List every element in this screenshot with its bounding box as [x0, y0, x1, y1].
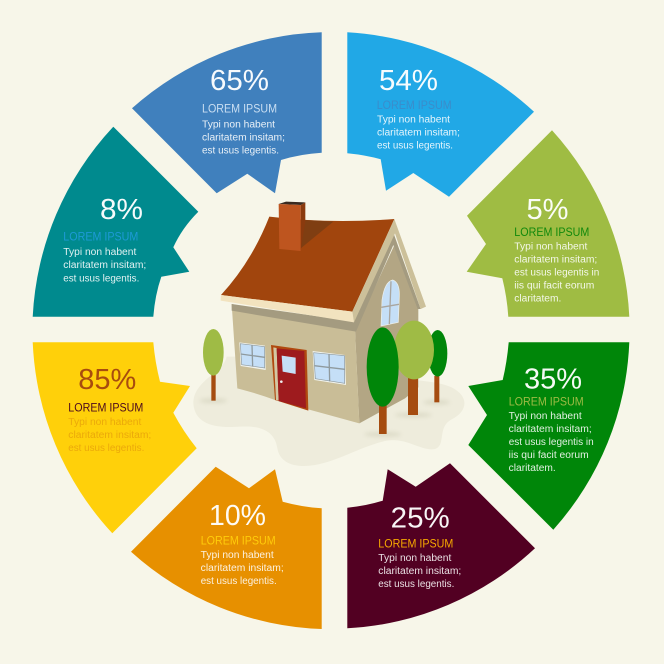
heading: LOREM IPSUM: [378, 539, 453, 551]
percentage: 25%: [391, 503, 450, 535]
tree: small left: [199, 329, 227, 403]
heading: LOREM IPSUM: [68, 403, 143, 415]
body text: [68, 417, 151, 454]
body text: Typi non habent: [378, 553, 452, 564]
side wall: [355, 246, 418, 423]
body text: [63, 247, 146, 284]
chimney shadow on roof: [301, 220, 333, 248]
percentage: 35%: [524, 363, 582, 395]
body text: claritatem insitam;: [377, 128, 460, 138]
panel: 10% orange: [131, 467, 322, 629]
body text: est usus legentis.: [202, 146, 279, 156]
heading: LOREM IPSUM: [201, 535, 276, 547]
body text: claritatem insitam;: [63, 260, 146, 271]
tree: back right: [423, 330, 450, 405]
body text: claritatem insitam;: [201, 563, 284, 574]
body text: Typi non habent: [509, 411, 582, 422]
gable trim: [352, 219, 426, 322]
body text: est usus legentis.: [378, 579, 454, 590]
body text: [514, 242, 599, 304]
percentage: 8%: [100, 194, 143, 226]
roof: [221, 217, 394, 312]
body text: claritatem insitam;: [202, 132, 285, 144]
body text: Typi non habent: [201, 550, 274, 561]
body text: claritatem.: [514, 294, 561, 304]
ground patch: [193, 357, 464, 466]
chimney: [279, 202, 305, 251]
body text: est usus legentis in: [509, 437, 594, 448]
body text: Typi non habent: [514, 242, 588, 252]
body text: est usus legentis.: [377, 140, 453, 152]
panel: 25% maroon: [347, 463, 535, 628]
panel: 35% green: [468, 342, 629, 530]
panel: 65% steel blue: [132, 32, 322, 193]
heading: LOREM IPSUM: [509, 397, 584, 409]
percentage: 85%: [78, 364, 136, 396]
panel: 8% teal: [33, 127, 198, 317]
panel: 5% lime: [467, 130, 629, 317]
body text: Typi non habent: [202, 120, 275, 130]
percentage: 65%: [210, 65, 269, 97]
heading: LOREM IPSUM: [202, 104, 277, 116]
body text: est usus legentis in: [514, 268, 599, 278]
body text: est usus legentis.: [68, 443, 144, 454]
percentage: 54%: [379, 65, 438, 97]
body text: claritatem insitam;: [509, 424, 592, 435]
percentage: 5%: [526, 194, 568, 226]
under-eave shadow: [232, 304, 356, 332]
body text: claritatem insitam;: [378, 566, 461, 577]
tree: front: [364, 327, 401, 437]
heading: LOREM IPSUM: [63, 231, 138, 243]
body text: est usus legentis.: [63, 274, 139, 284]
body text: Typi non habent: [377, 114, 450, 126]
body text: [509, 411, 594, 474]
arched gable window: [381, 280, 399, 326]
heading: LOREM IPSUM: [514, 227, 589, 239]
illustration: house with trees: [193, 202, 464, 466]
body text: iis qui facit eorum: [509, 450, 589, 461]
percentage: 10%: [209, 500, 266, 532]
door: [271, 345, 308, 411]
body text: [202, 120, 285, 156]
gable shadow: [354, 233, 421, 332]
body text: est usus legentis.: [201, 576, 277, 587]
body text: [377, 114, 460, 152]
front wall: [232, 304, 359, 423]
body text: claritatem insitam;: [68, 430, 151, 441]
right front window: [313, 351, 346, 385]
body text: iis qui facit eorum: [514, 280, 594, 292]
body text: Typi non habent: [63, 247, 137, 258]
panel: 85% yellow: [33, 342, 197, 533]
heading: LOREM IPSUM: [377, 100, 452, 112]
body text: Typi non habent: [68, 417, 142, 428]
body text: [378, 553, 461, 590]
roof eave: [221, 295, 354, 322]
body text: claritatem.: [509, 463, 556, 474]
tree: middle: [394, 321, 434, 417]
body text: claritatem insitam;: [514, 254, 597, 266]
panel: 54% sky blue: [347, 32, 534, 197]
body text: [201, 550, 284, 587]
left front window: [239, 342, 266, 370]
